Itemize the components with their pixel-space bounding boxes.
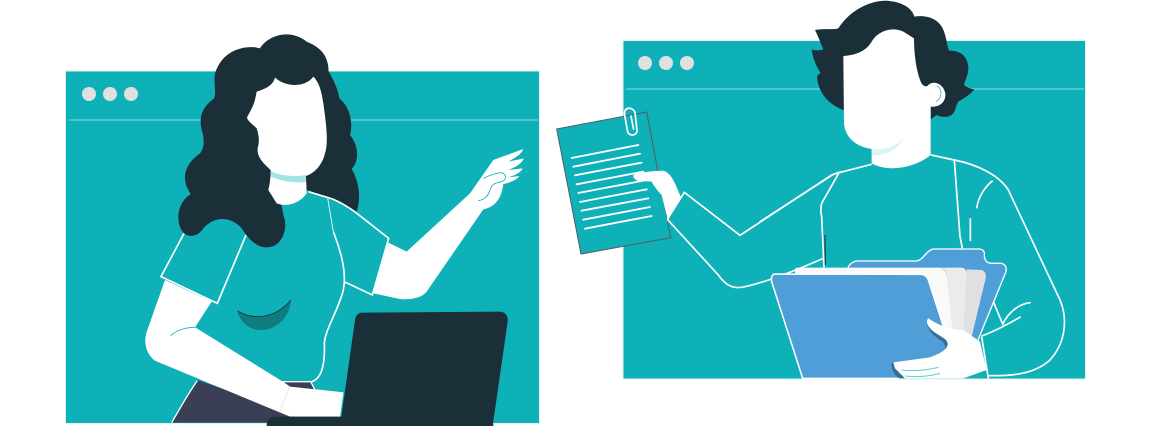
back folder — [848, 249, 1006, 343]
man head — [812, 1, 974, 168]
woman shirt fold shadow — [237, 300, 291, 330]
figure: man with folder and document — [557, 1, 1064, 378]
woman trousers — [172, 380, 315, 423]
panel: left browser window — [66, 71, 540, 424]
man hand shadow — [892, 323, 952, 378]
folder papers — [795, 268, 986, 343]
man ear line — [936, 86, 941, 102]
front folder — [771, 274, 947, 378]
man hand holding folder — [893, 318, 987, 378]
woman hair — [178, 34, 359, 247]
woman neck shadow — [271, 171, 306, 182]
woman left arm — [145, 280, 343, 417]
woman arm redraw over trousers — [155, 327, 343, 417]
man hair — [812, 1, 974, 119]
man face and neck — [843, 29, 945, 168]
man torso outlines — [760, 155, 1064, 376]
icon: window dots left — [82, 87, 138, 101]
panel: right browser window — [623, 40, 1086, 379]
woman shirt outlines — [161, 192, 389, 382]
man chin shadow — [872, 138, 903, 155]
icon: paperclip — [624, 108, 637, 135]
laptop — [267, 312, 508, 426]
icon: window dots right — [638, 56, 694, 70]
figure: woman with laptop — [145, 34, 524, 426]
man hand holding document — [633, 171, 681, 218]
document with text lines — [557, 112, 671, 254]
woman raised arm and hand — [373, 149, 524, 299]
folders — [771, 249, 1006, 378]
man sleeve outline — [667, 172, 842, 288]
man document arm — [557, 108, 842, 288]
woman face and neck — [247, 77, 327, 205]
